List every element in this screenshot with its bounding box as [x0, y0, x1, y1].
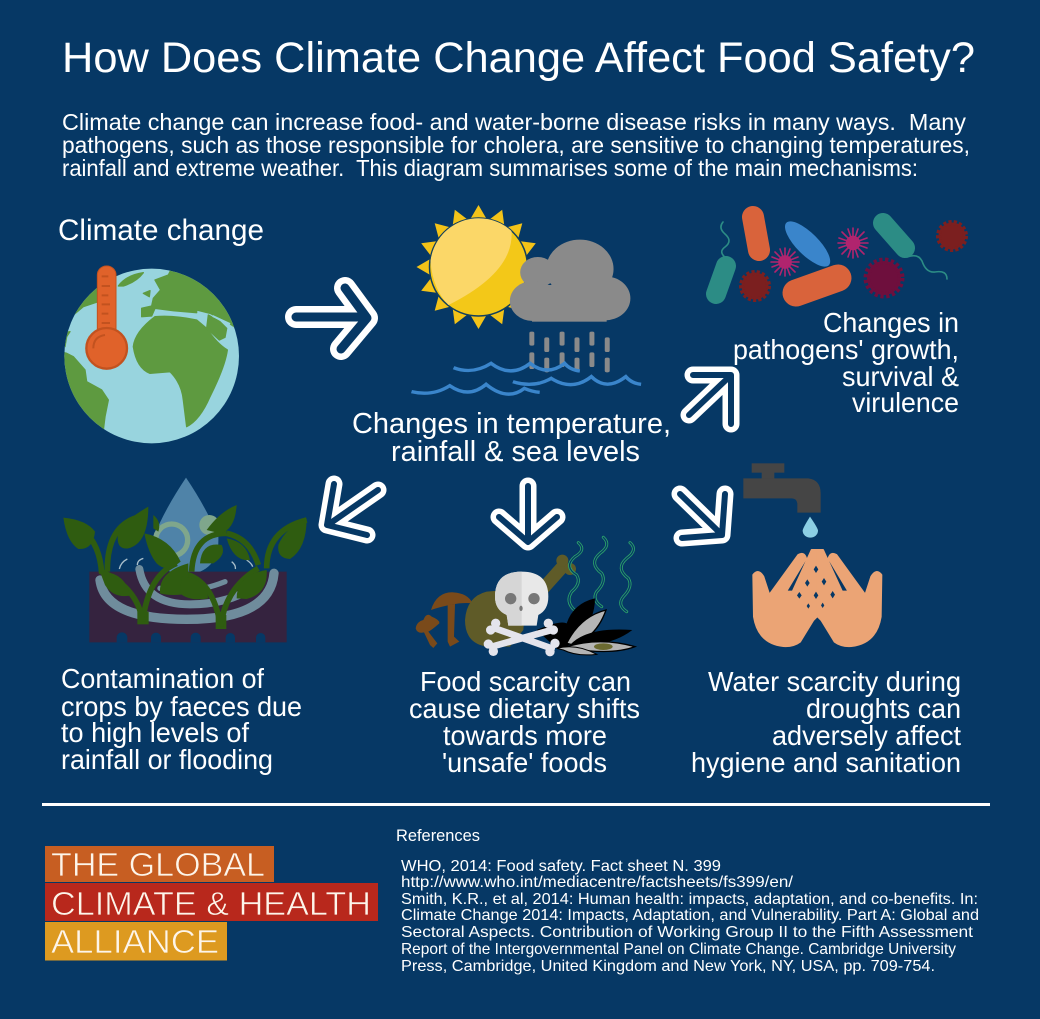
references: References: [396, 827, 480, 845]
icon: crops, soil and water drop: [63, 478, 307, 642]
panel: pathogens: [716, 215, 966, 418]
icon: washing hands: [753, 550, 881, 646]
intro text block: Climate change can increase food- and water-borne disease risks in many ways. Many: [62, 109, 967, 135]
label: pathogens: pathogens' growth,: [733, 334, 959, 365]
heading: climate change: Climate change: [58, 214, 264, 247]
logo: The Global Climate & Health Alliance: CLIMATE & HEALTH: [51, 886, 371, 923]
icon: bacteria and viruses: [716, 215, 966, 300]
logo: The Global Climate & Health Alliance: THE GLOBAL: [51, 847, 265, 884]
panel: climate change: [57, 214, 264, 443]
label: water scarcity: droughts can: [806, 693, 961, 724]
icon: globe with thermometer: [64, 266, 239, 444]
references: Smith, K.R., et al, 2014: Human health: impacts, adaptation, and co-benefits. In:: [401, 891, 978, 908]
label: pathogens: virulence: [852, 387, 959, 418]
panel: changes in temperature, rainfall and sea levels: [352, 205, 671, 468]
label: temperature, rainfall and sea levels: Changes in temperature,: [352, 408, 671, 440]
label: temperature, rainfall and sea levels: [352, 408, 671, 468]
icon: rain cloud: [510, 240, 630, 372]
label: water scarcity: adversely affect: [772, 720, 961, 751]
label: contamination: crops by faeces due: [61, 691, 302, 722]
label: food scarcity: cause dietary shifts: [409, 693, 640, 724]
arrow: climate change to weather: [296, 288, 367, 349]
label: food scarcity: towards more: [443, 720, 607, 751]
references: Climate Change 2014: Impacts, Adaptation, and Vulnerability. Part A: Global and: [401, 907, 979, 924]
label: pathogens: [733, 307, 959, 418]
icon: unsafe foods and skull: [416, 537, 635, 656]
references: [396, 827, 979, 975]
references: WHO, 2014: Food safety. Fact sheet N. 399: [401, 858, 721, 875]
arrow: to food: [499, 486, 557, 542]
label: pathogens: Changes in: [823, 307, 959, 338]
arrow: to pathogens: [689, 375, 731, 424]
intro text block: rainfall and extreme weather. This diagram summarises some of the main mechanisms:: [62, 155, 918, 181]
icon: waves: [411, 363, 641, 394]
panel: contamination of crops: [61, 478, 307, 775]
arrow: to crops: [327, 484, 378, 535]
intro text block: [62, 109, 970, 181]
label: contamination: rainfall or flooding: [61, 744, 273, 775]
references: http://www.who.int/mediacentre/factsheets/fs399/en/: [401, 874, 794, 891]
label: food scarcity: 'unsafe' foods: [442, 747, 607, 778]
panel: water scarcity: [691, 463, 961, 778]
label: pathogens: survival &: [842, 361, 959, 392]
label: water scarcity: Water scarcity during: [708, 666, 961, 697]
icon: tap and water drop: [743, 463, 821, 538]
label: water scarcity: [691, 666, 961, 778]
label: water scarcity: hygiene and sanitation: [691, 747, 961, 778]
panel: food scarcity: [409, 537, 640, 778]
label: contamination: Contamination of: [61, 663, 264, 694]
label: contamination: to high levels of: [61, 717, 249, 748]
label: food scarcity: Food scarcity can: [420, 666, 631, 697]
icon: sun: [416, 205, 540, 329]
references: Sectoral Aspects. Contribution of Working Group II to the Fifth Assessment: [401, 924, 974, 941]
title: How Does Climate Change Affect Food Safety?: [62, 34, 975, 82]
label: food scarcity: [409, 666, 640, 778]
label: temperature, rainfall and sea levels: rainfall & sea levels: [391, 436, 640, 468]
arrow: to water: [680, 494, 725, 538]
logo: The Global Climate & Health Alliance: ALLIANCE: [51, 924, 219, 961]
logo: The Global Climate & Health Alliance: [45, 846, 378, 961]
label: contamination: [61, 663, 302, 775]
references: Press, Cambridge, United Kingdom and New York, NY, USA, pp. 709-754.: [401, 958, 935, 975]
intro text block: pathogens, such as those responsible for cholera, are sensitive to changing temperatures,: [62, 132, 970, 158]
references: Report of the Intergovernmental Panel on Climate Change. Cambridge University: [401, 941, 956, 958]
